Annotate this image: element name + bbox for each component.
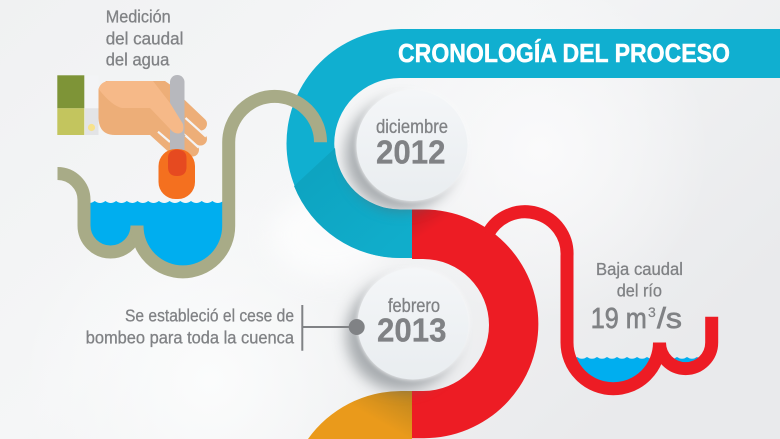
band: teal lower shading [294, 148, 412, 258]
label: low flow [596, 259, 683, 301]
panel: blue timeline band with title [286, 29, 780, 258]
label: low flow: Baja caudal [596, 259, 683, 279]
year label: 2012 [376, 134, 446, 170]
icon: cuff and sleeve [57, 75, 98, 135]
water pool [567, 343, 711, 388]
panel: diciembre 2012 disc [356, 90, 468, 202]
olive pipe [58, 96, 320, 272]
shadow: first disc [345, 99, 457, 211]
label: flow value: /s [657, 303, 682, 335]
water pool [84, 201, 229, 272]
disc [356, 90, 468, 201]
label: measurement: Medición [106, 7, 171, 27]
label: flow value: 19 m [591, 303, 647, 335]
shading: red band top [412, 210, 452, 240]
connector line [302, 305, 352, 351]
callout text [86, 306, 294, 347]
year label: 2013 [377, 312, 446, 349]
panel: red timeline band [412, 210, 538, 438]
month label: diciembre [376, 117, 448, 138]
callout text: Se estableció el cese de [125, 306, 294, 326]
title: CRONOLOGÍA DEL PROCESO [398, 38, 730, 68]
connector dot [349, 319, 365, 335]
label: measurement: del caudal [106, 28, 183, 48]
disc [358, 268, 468, 380]
panel: water measurement illustration [57, 7, 321, 272]
panel: orange timeline band [308, 391, 412, 439]
callout text: bombeo para toda la cuenca [86, 327, 294, 347]
shadow: second disc [346, 279, 458, 391]
icon: orange sensor [158, 149, 195, 199]
palm [98, 81, 182, 155]
fingers [160, 95, 200, 150]
callout: cessation of pumping [86, 305, 365, 351]
thumb [98, 81, 183, 134]
label: measurement: del agua [106, 50, 170, 70]
panel: febrero 2013 disc [357, 268, 469, 380]
band: teal curve [286, 29, 780, 258]
probe [170, 75, 184, 160]
finger gaps [158, 118, 206, 148]
panel: low river flow illustration [488, 212, 712, 389]
icon: hand [98, 75, 206, 160]
month label: febrero [388, 296, 440, 317]
red pipe [488, 212, 712, 389]
label: measurement [106, 7, 183, 70]
label: low flow: del río [617, 281, 662, 301]
label: flow value: 3 [648, 304, 656, 320]
